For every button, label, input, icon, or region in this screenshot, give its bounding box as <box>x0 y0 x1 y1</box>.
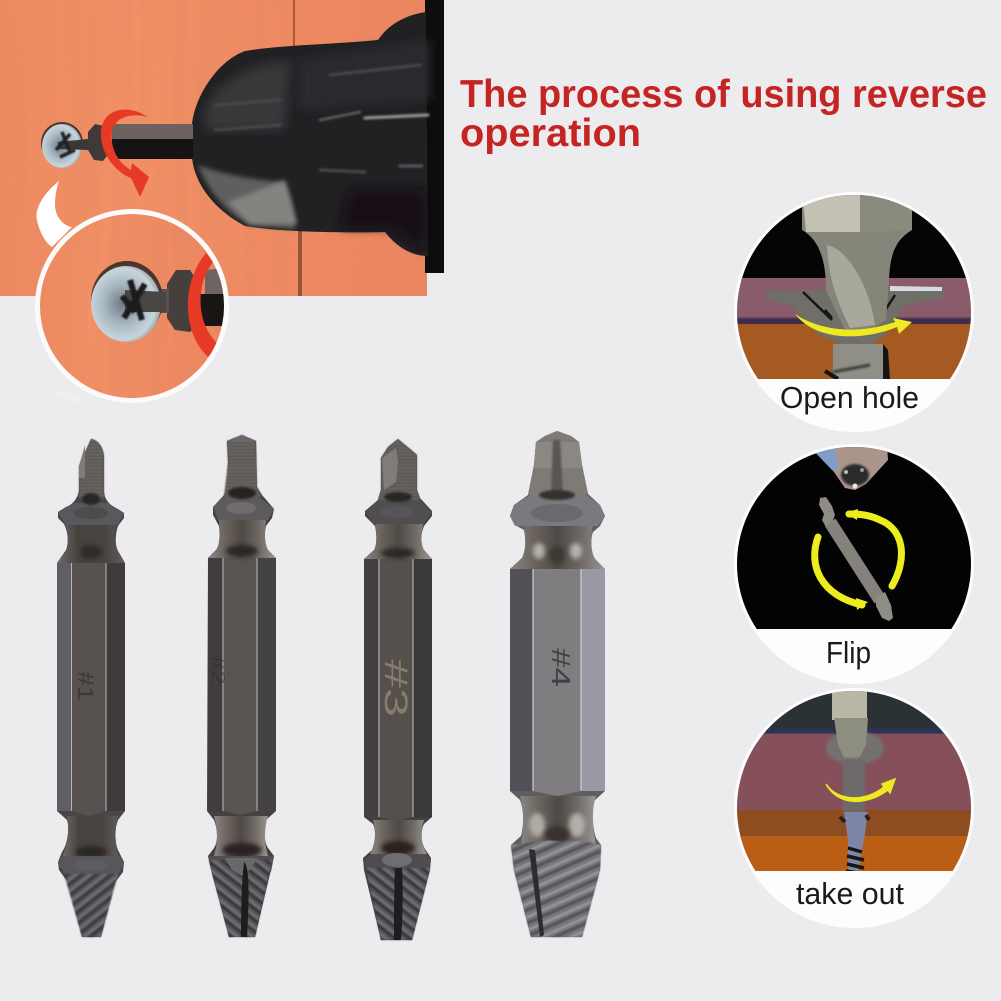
title: operation <box>460 112 641 155</box>
icon: screw hole at top <box>812 445 888 490</box>
icon: black drill <box>192 0 444 273</box>
lower neck <box>62 816 119 858</box>
threaded cone with flute <box>209 860 272 937</box>
soft callout shadow <box>20 370 110 408</box>
panel: step 3 take out <box>734 685 975 931</box>
panel: extractor bit #1 <box>57 439 125 937</box>
drill tip <box>224 435 262 496</box>
upper neck <box>510 524 605 569</box>
drill tip <box>378 439 420 500</box>
arrow: yellow rotation arrow <box>826 779 895 801</box>
threaded cone <box>64 874 118 937</box>
icon: extractor bit <box>802 190 912 330</box>
arrow: red rotation arrow <box>101 110 149 197</box>
wood background <box>0 0 427 296</box>
hexagonal faces <box>510 566 605 796</box>
flanges <box>365 500 432 524</box>
engraved mark #2: #2 <box>208 655 228 685</box>
panel: magnified screw callout <box>35 209 229 403</box>
lower neck <box>520 796 596 845</box>
drill tip <box>528 431 588 495</box>
callout swoosh <box>37 181 72 247</box>
panel: extractor bit #2 <box>207 435 276 937</box>
arrow: magnified red arc <box>188 253 219 357</box>
upper neck <box>57 522 125 563</box>
label: flip: Flip <box>826 635 871 670</box>
icon: screw head <box>41 122 88 168</box>
arrow: yellow rotation arrow <box>795 314 912 336</box>
flanges <box>213 496 274 520</box>
panel: step 1 open hole <box>734 190 975 439</box>
icon: magnified screw head <box>91 261 166 342</box>
engraved mark #4: #4 <box>546 648 576 687</box>
threaded cone with flute <box>366 868 430 940</box>
icon: screw being removed <box>826 688 884 874</box>
icon: magnified shaft <box>161 268 224 332</box>
upper neck <box>208 520 276 558</box>
engraved mark #1: #1 <box>73 671 98 701</box>
icon: bit shaft in drill <box>88 124 193 161</box>
label: take out: take out <box>796 876 904 911</box>
upper neck <box>364 522 432 559</box>
panel: drill photo <box>0 0 444 296</box>
panel: extractor bit #4 <box>510 431 605 937</box>
hexagonal faces <box>57 560 125 816</box>
arrow: yellow flip arcs <box>815 509 901 610</box>
drill tip <box>79 439 104 498</box>
panel: step 2 flip <box>734 440 975 689</box>
hexagonal faces <box>208 555 276 815</box>
threaded cone with flute <box>511 841 601 937</box>
icon: screw countersink wings <box>765 286 944 379</box>
photo backdrop <box>735 685 975 872</box>
lower neck <box>214 816 268 856</box>
title <box>460 73 987 155</box>
lower neck <box>370 820 427 854</box>
panel: extractor bit #3 <box>363 439 432 940</box>
flange <box>510 494 605 526</box>
title: The process of using reverse <box>460 73 987 116</box>
label: open hole: Open hole <box>780 380 919 415</box>
flanges <box>58 503 124 525</box>
hexagonal faces <box>364 556 432 821</box>
photo backdrop <box>735 190 975 379</box>
engraved mark #3: #3 <box>378 659 414 717</box>
icon: double-ended bit <box>819 497 893 621</box>
